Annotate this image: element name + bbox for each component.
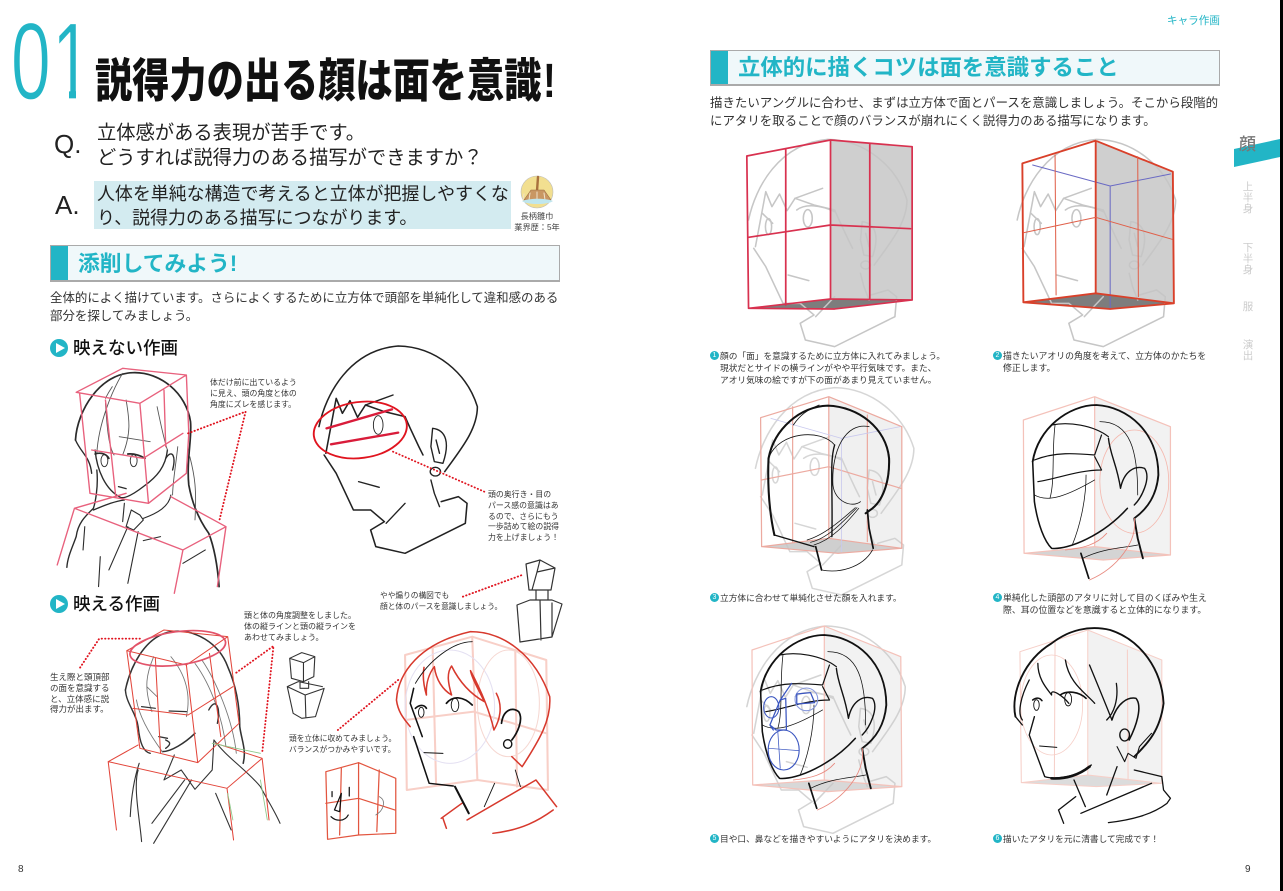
drawing: boy head with red mark on eyes and ear [310,346,477,553]
caption 3: 3 [713,594,716,600]
drawing: red box with simplified face [326,763,396,839]
page number 8: 8 [18,864,24,875]
note: body only forward: 体だけ前に出ているよう [210,378,297,387]
author credit: 業界歴：5年 [514,223,560,232]
figure 1: box around head [747,139,912,347]
figure 4: head with planes [1023,397,1170,580]
question text [97,122,483,168]
side tab: lower body: 下半身 [1243,242,1253,276]
caption 4 [993,592,1207,614]
note: depth and eye perspective [488,490,559,542]
drawing: boy head in red with box construction [396,632,557,833]
subheading: good drawing: 映える作画 [73,594,160,614]
caption 1: 顔の「面」を意識するために立方体に入れてみましょう。 [720,350,945,360]
icon: author avatar with mop [521,176,553,208]
caption 1: アオリ気味の絵ですが下の面があまり見えていません。 [720,374,936,384]
figure 5: head with blue facial guides [747,626,905,833]
note: depth and eye perspective: 一歩詰めて絵の説得 [488,522,559,531]
intro text left: 全体的によく描けています。さらによくするために立方体で頭部を単純化して違和感のある [50,290,558,304]
caption 1: 現状だとサイドの横ラインがやや平行気味です。また、 [720,362,936,372]
caption 1: 1 [713,352,716,358]
drawing: tilted head and body block [517,560,562,642]
caption 3: 立方体に合わせて単純化させた顔を入れます。 [720,592,902,602]
section heading: right page [710,50,1220,86]
side tab: staging: 演出 [1243,339,1253,362]
answer label: A. [55,190,80,220]
dotted arrows: not-good annotations [188,412,522,597]
side tab: upper body: 上半身 [1243,181,1253,215]
note: slight low angle [380,591,502,611]
note: hairline and top of head: の面を意識する [50,683,110,693]
intro text right: 描きたいアングルに合わせ、まずは立方体で面とパースを意識しましょう。そこから段階的 [710,96,1218,110]
note: angle adjustment: 頭と体の角度調整をしました。 [244,611,356,620]
note: depth and eye perspective: 頭の奥行き・目の [488,490,551,499]
figure 3: simplified head in box [755,388,914,595]
intro text right: にアタリを取ることで顔のバランスが崩れにくく説得力のある描写になります。 [710,114,1156,128]
figure 6: finished clean drawing [1014,628,1170,823]
author credit [514,212,560,232]
icon: play bullet not-good drawing [50,339,68,357]
figure 2: corrected box [1017,139,1176,347]
caption 4: 4 [996,594,999,600]
question text: どうすれば説得力のある描写ができますか？ [97,148,483,168]
author credit: 長柄雛巾 [521,212,553,221]
section heading: correction [50,245,560,282]
caption 4: 単純化した頭部のアタリに対して目のくぼみや生え [1003,592,1207,602]
drawing: small head and body block [287,653,324,718]
side tab: clothes: 服 [1243,301,1253,313]
note: fit head into solid: 頭を立体に収めてみましょう。 [289,734,396,743]
note: body only forward: 角度にズレを感じます。 [210,400,296,409]
title: 説得力の出る顔は面を意識! [95,55,556,108]
answer highlighted text: 人体を単純な構造で考えると立体が把握しやすくな [97,184,509,204]
note: slight low angle: やや煽りの構図でも [380,591,449,600]
caption 2: 修正します。 [1003,362,1055,372]
drawing: girl before correction with pink boxes [57,368,226,593]
intro text left [50,290,558,323]
chapter number 01: 1 [52,1,92,123]
running header: キャラ作画 [1167,15,1220,27]
caption 5: 目や口、鼻などを描きやすいようにアタリを決めます。 [720,834,936,844]
side tab: active face chapter [1234,135,1280,167]
caption 2: 2 [996,352,999,358]
drawing: girl after correction with red boxes [108,625,280,843]
subheading: not good drawing: 映えない作画 [73,338,178,358]
note: angle adjustment [244,611,356,642]
dotted arrows: good annotations [80,639,398,753]
note: hairline and top of head: 生え際と頭頂部 [50,672,110,682]
caption 5: 5 [713,834,716,842]
intro text left: 部分を探してみましょう。 [50,309,198,323]
note: fit head into solid [289,734,396,754]
note: hairline and top of head: と、立体感に説 [50,694,109,704]
note: body only forward [210,378,297,409]
note: hairline and top of head: 得力が出ます。 [50,704,109,714]
section heading: right page: 立体的に描くコツは面を意識すること [738,55,1119,80]
caption 6: 6 [996,834,999,842]
note: depth and eye perspective: るので、さらにもう [488,512,558,521]
note: body only forward: に見え、頭の角度と体の [210,389,297,398]
note: slight low angle: 顔と体のパースを意識しましょう。 [380,602,502,611]
question text: 立体感がある表現が苦手です。 [97,123,365,144]
chapter number 01 [11,1,92,123]
caption 2: 描きたいアオリの角度を考えて、立方体のかたちを [1003,350,1206,360]
caption 2 [993,350,1206,372]
note: fit head into solid: バランスがつかみやすいです。 [289,745,395,754]
section heading: correction: 添削してみよう! [78,251,237,276]
question label: Q. [54,129,81,159]
note: angle adjustment: あわせてみましょう。 [244,633,324,642]
answer highlighted text [94,181,511,229]
caption 1 [710,350,945,384]
note: angle adjustment: 体の縦ラインと頭の縦ラインを [244,622,356,631]
caption 6: 描いたアタリを元に清書して完成です！ [1003,834,1159,844]
intro text right [710,96,1218,128]
icon: play bullet good drawing [50,595,68,613]
note: depth and eye perspective: 力を上げましょう！ [488,533,559,542]
answer highlighted text: り、説得力のある描写につながります。 [97,208,417,228]
note: hairline and top of head [50,672,110,714]
caption 4: 際、耳の位置などを意識すると立体的になります。 [1003,604,1206,614]
side tab: active face chapter: 顔 [1239,135,1256,154]
chapter number 01: 0 [11,1,51,123]
note: depth and eye perspective: パース感の意識はあ [488,501,559,510]
black page edge strip [1280,0,1283,891]
page number 9: 9 [1245,864,1251,875]
